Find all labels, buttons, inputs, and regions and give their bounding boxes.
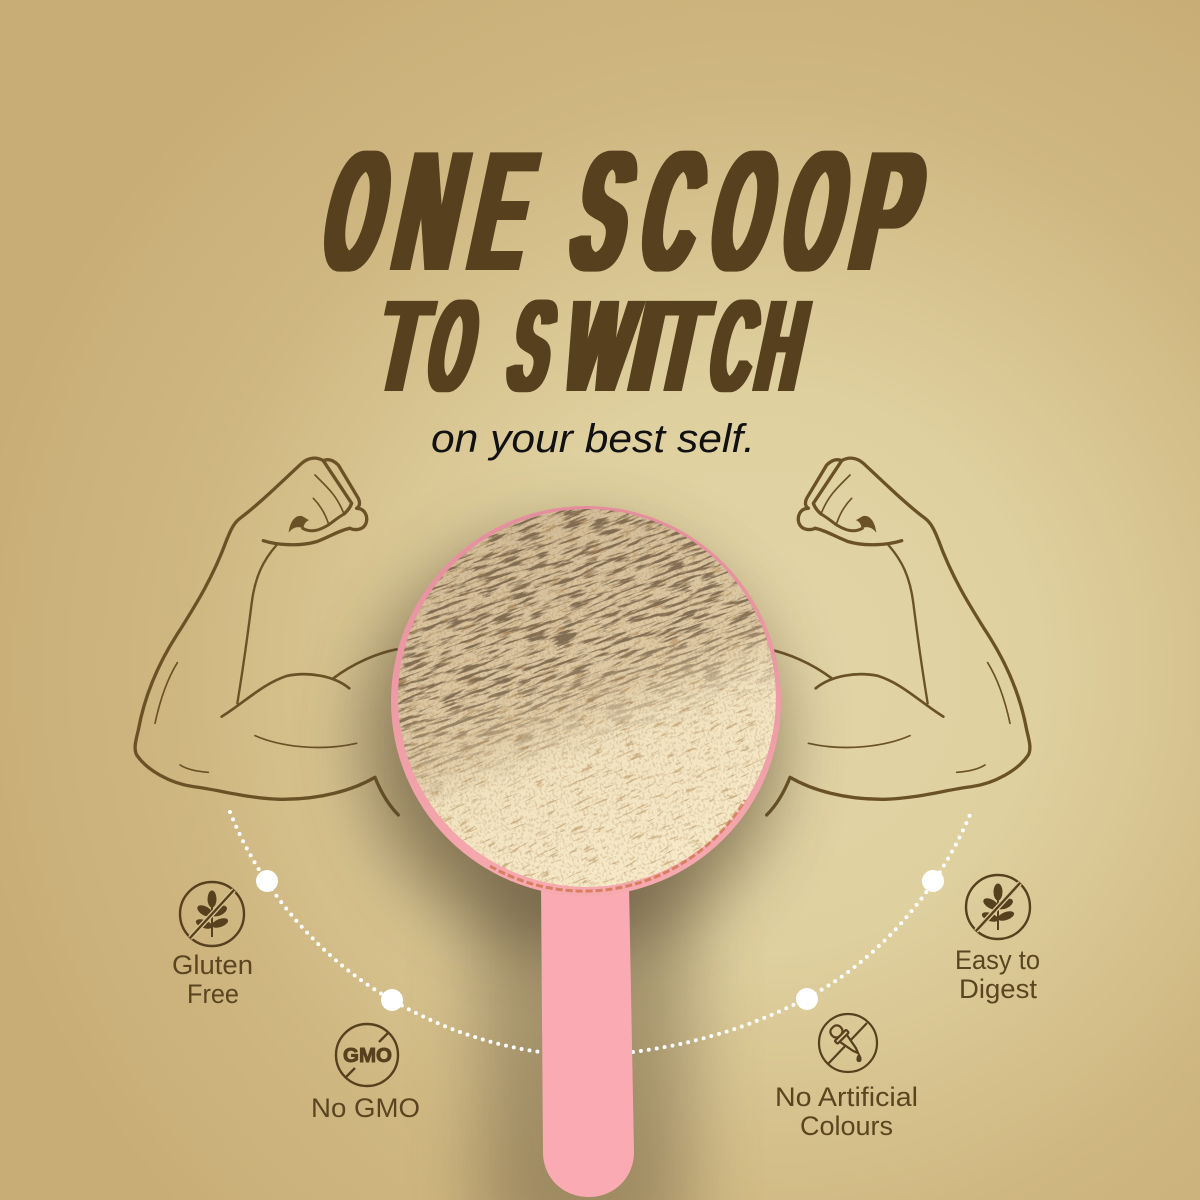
title	[310, 115, 939, 420]
label	[955, 945, 1040, 1004]
feature: no GMO	[311, 1024, 420, 1123]
scoop handle	[541, 885, 634, 1197]
label	[775, 1082, 918, 1141]
label: Easy to	[955, 945, 1040, 975]
arc nodes	[256, 870, 944, 1011]
scoop bowl	[391, 506, 781, 896]
title line 2: H	[746, 273, 819, 420]
title line 2: C	[699, 273, 770, 420]
feature: gluten free	[172, 882, 253, 1009]
label: Gluten	[172, 950, 253, 980]
title line 2: W	[552, 273, 648, 420]
label: No GMO	[311, 1093, 420, 1123]
right flexed arm	[767, 458, 1030, 815]
title line 2: O	[417, 273, 490, 420]
powder fill	[398, 509, 776, 893]
title line 2: T	[365, 273, 441, 420]
title line 1: O	[310, 115, 406, 307]
title line 2: I	[618, 273, 677, 420]
title line 1: O	[697, 115, 793, 307]
tagline: on your best self.	[431, 417, 755, 461]
icon: crossed dropper	[819, 1014, 877, 1072]
icon: crossed wheat	[966, 875, 1030, 939]
dotted arc right	[633, 810, 972, 1052]
title line 1: S	[558, 115, 650, 307]
label: Digest	[959, 974, 1038, 1004]
title line 1: P	[838, 115, 939, 307]
pink scoop	[391, 506, 781, 1197]
feature: no artificial colours	[775, 1014, 918, 1141]
icon: GMO crossed: GMO	[343, 1045, 392, 1067]
left flexed arm	[135, 458, 398, 815]
title line 1: C	[628, 115, 720, 307]
label	[172, 950, 253, 1009]
icon: crossed wheat	[180, 882, 244, 946]
title line 1	[310, 115, 939, 307]
dotted arc left	[230, 812, 540, 1052]
feature: easy to digest	[955, 875, 1040, 1004]
title line 1: N	[381, 115, 482, 307]
label: Free	[187, 979, 239, 1009]
title line 2: S	[498, 273, 567, 420]
title line 1: O	[769, 115, 865, 307]
scoop shadow	[367, 535, 777, 1200]
title line 1: E	[457, 115, 550, 307]
title line 2	[365, 273, 819, 420]
label: No Artificial	[775, 1082, 918, 1112]
title line 2: T	[644, 273, 720, 420]
label: Colours	[800, 1111, 893, 1141]
